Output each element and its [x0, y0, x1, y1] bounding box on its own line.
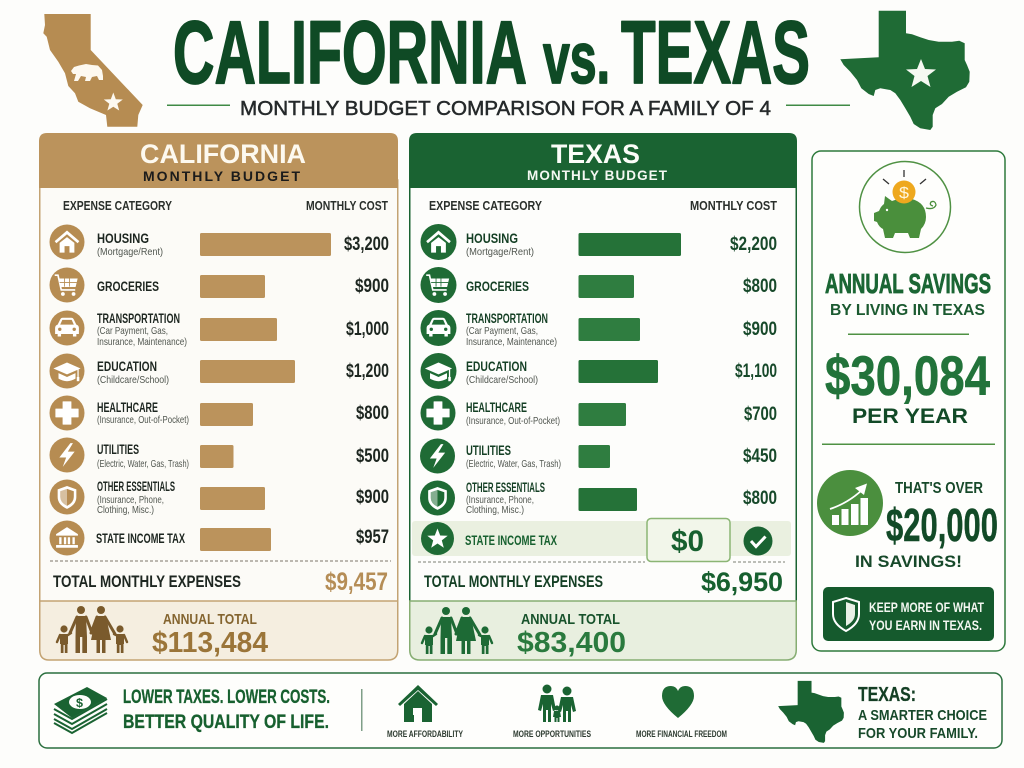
- row: healthcare: [420, 396, 777, 430]
- table headings: MONTHLY COST: [690, 199, 777, 213]
- icon: more opportunities: MORE OPPORTUNITIES: [513, 729, 591, 740]
- icon: stack of money: [54, 687, 107, 733]
- annual total: ANNUAL TOTAL: [521, 611, 620, 628]
- row: education: EDUCATION: [466, 359, 527, 374]
- row: housing: HOUSING: [466, 231, 518, 246]
- row: healthcare: $700: [744, 404, 777, 425]
- panel: bottom banner: [39, 673, 1002, 748]
- total monthly expenses: $6,950: [701, 567, 783, 597]
- row: state income tax highlight: [412, 518, 791, 562]
- title: CALIFORNIA: [173, 2, 527, 102]
- row: groceries: [50, 268, 389, 302]
- Texas panel frame: [410, 180, 796, 602]
- row: other essentials: OTHER ESSENTIALS: [97, 479, 175, 494]
- row: transportation: TRANSPORTATION: [466, 311, 548, 326]
- row: groceries: $900: [355, 276, 389, 297]
- row: healthcare: [50, 396, 389, 430]
- icon: piggy bank: [860, 162, 950, 252]
- row: education: EDUCATION: [97, 359, 157, 374]
- over 20,000 callout: THAT'S OVER: [895, 480, 983, 497]
- icon: small Texas map: [778, 681, 844, 743]
- annual total: $83,400: [517, 627, 626, 659]
- annual total: ANNUAL TOTAL: [163, 611, 257, 628]
- row: other essentials: OTHER ESSENTIALS: [466, 480, 545, 495]
- icon: more affordability: [387, 685, 463, 740]
- row: utilities: $500: [356, 446, 389, 467]
- icon: California map: [43, 14, 143, 127]
- row: state income tax: $957: [356, 527, 389, 548]
- row: other essentials: (Insurance, Phone,: [97, 494, 164, 506]
- total monthly expenses: TOTAL MONTHLY EXPENSES: [424, 572, 603, 591]
- row: healthcare: $800: [356, 403, 389, 424]
- annual total: $113,484: [152, 627, 268, 659]
- row: transportation: TRANSPORTATION: [97, 311, 180, 326]
- row: other essentials: (Insurance, Phone,: [466, 494, 534, 506]
- table headings: [63, 199, 388, 213]
- row: utilities: UTILITIES: [466, 443, 511, 458]
- Texas header: [409, 133, 797, 188]
- row: state income tax highlight: $0: [671, 525, 704, 558]
- California header: MONTHLY BUDGET: [143, 168, 300, 184]
- row: transportation: $900: [743, 319, 777, 340]
- row: transportation: $1,000: [346, 319, 389, 340]
- row: housing: $3,200: [344, 234, 389, 255]
- row: transportation: (Car Payment, Gas,: [97, 325, 168, 337]
- row: transportation: Insurance, Maintenance): [97, 336, 187, 348]
- title: vs.: [543, 19, 610, 99]
- banner closing text: A SMARTER CHOICE: [858, 707, 987, 724]
- savings figure: [825, 344, 990, 428]
- table headings: [429, 199, 777, 213]
- callout: keep more: YOU EARN IN TEXAS.: [869, 617, 982, 633]
- annual total: [40, 601, 398, 660]
- subtitle: MONTHLY BUDGET COMPARISON FOR A FAMILY OF 4: [240, 97, 771, 120]
- row: state income tax: [50, 520, 389, 556]
- icon: Texas map: [840, 11, 970, 130]
- Texas header: TEXAS: [551, 139, 640, 169]
- row: other essentials: $800: [743, 488, 777, 509]
- California header: CALIFORNIA: [140, 139, 306, 169]
- panel: Texas budget: [409, 133, 797, 660]
- row: transportation: (Car Payment, Gas,: [466, 325, 538, 337]
- icon: more financial freedom: [636, 686, 727, 740]
- icon: stack of money: $: [76, 696, 83, 710]
- row: education: $1,100: [735, 361, 777, 382]
- banner closing text: FOR YOUR FAMILY.: [858, 725, 978, 742]
- row: housing: [50, 224, 389, 260]
- annual total: [410, 601, 796, 660]
- row: groceries: GROCERIES: [97, 279, 159, 294]
- row: housing: [420, 224, 777, 260]
- title: TEXAS: [621, 2, 810, 102]
- row: education: (Childcare/School): [466, 374, 538, 386]
- row: state income tax: STATE INCOME TAX: [96, 531, 185, 546]
- table headings: EXPENSE CATEGORY: [429, 199, 543, 213]
- table headings: EXPENSE CATEGORY: [63, 199, 173, 213]
- icon: growth chart: [817, 470, 883, 536]
- row: utilities: [420, 438, 777, 474]
- table headings: MONTHLY COST: [306, 199, 388, 213]
- icon: more opportunities: [513, 684, 591, 740]
- row: transportation: [420, 310, 777, 348]
- row: education: [50, 354, 389, 388]
- row: other essentials: [50, 479, 389, 516]
- icon: more financial freedom: MORE FINANCIAL FREEDOM: [636, 729, 727, 740]
- row: education: $1,200: [346, 361, 389, 382]
- row: housing: (Mortgage/Rent): [97, 246, 163, 258]
- icon: piggy bank: $: [899, 185, 909, 202]
- total monthly expenses: [424, 567, 783, 597]
- row: healthcare: (Insurance, Out-of-Pocket): [97, 414, 189, 426]
- row: transportation: [50, 310, 389, 348]
- row: housing: $2,200: [730, 234, 777, 255]
- total monthly expenses: [53, 568, 388, 596]
- row: utilities: UTILITIES: [97, 442, 139, 457]
- row: groceries: [420, 267, 777, 303]
- savings figure: PER YEAR: [852, 405, 968, 428]
- over 20,000 callout: IN SAVINGS!: [855, 552, 962, 571]
- panel: annual savings: [812, 151, 1005, 651]
- row: other essentials: [420, 480, 777, 516]
- row: healthcare: HEALTHCARE: [466, 400, 527, 415]
- banner closing text: [858, 684, 987, 742]
- callout: keep more: [823, 587, 994, 641]
- row: utilities: [50, 438, 389, 472]
- California header: [39, 133, 398, 188]
- banner slogan: LOWER TAXES. LOWER COSTS.: [123, 686, 330, 708]
- callout: keep more: KEEP MORE OF WHAT: [869, 599, 984, 615]
- row: education: (Childcare/School): [97, 374, 169, 386]
- total monthly expenses: $9,457: [325, 568, 388, 596]
- row: utilities: (Electric, Water, Gas, Trash): [466, 458, 561, 470]
- row: utilities: $450: [743, 446, 777, 467]
- row: state income tax highlight: STATE INCOME TAX: [465, 533, 557, 548]
- banner slogan: BETTER QUALITY OF LIFE.: [123, 711, 329, 733]
- row: education: [420, 353, 777, 389]
- total monthly expenses: TOTAL MONTHLY EXPENSES: [53, 572, 241, 591]
- row: utilities: (Electric, Water, Gas, Trash): [97, 458, 189, 470]
- panel: California budget: [39, 133, 398, 660]
- annual savings heading: [825, 268, 991, 319]
- banner slogan: [123, 686, 330, 733]
- row: other essentials: Clothing, Misc.): [97, 504, 154, 516]
- icon: more affordability: MORE AFFORDABILITY: [387, 729, 463, 740]
- Texas header: MONTHLY BUDGET: [527, 168, 668, 183]
- row: groceries: $800: [743, 276, 777, 297]
- banner closing text: TEXAS:: [858, 684, 916, 706]
- row: healthcare: (Insurance, Out-of-Pocket): [466, 415, 560, 427]
- savings figure: $30,084: [825, 344, 990, 407]
- row: healthcare: HEALTHCARE: [97, 400, 158, 415]
- row: other essentials: $900: [356, 487, 389, 508]
- over 20,000 callout: [855, 480, 998, 571]
- row: other essentials: Clothing, Misc.): [466, 504, 524, 516]
- row: housing: (Mortgage/Rent): [466, 246, 534, 258]
- row: groceries: GROCERIES: [466, 279, 529, 294]
- annual savings heading: BY LIVING IN TEXAS: [830, 302, 985, 319]
- row: housing: HOUSING: [97, 231, 149, 246]
- row: transportation: Insurance, Maintenance): [466, 336, 557, 348]
- California panel frame: [40, 180, 398, 602]
